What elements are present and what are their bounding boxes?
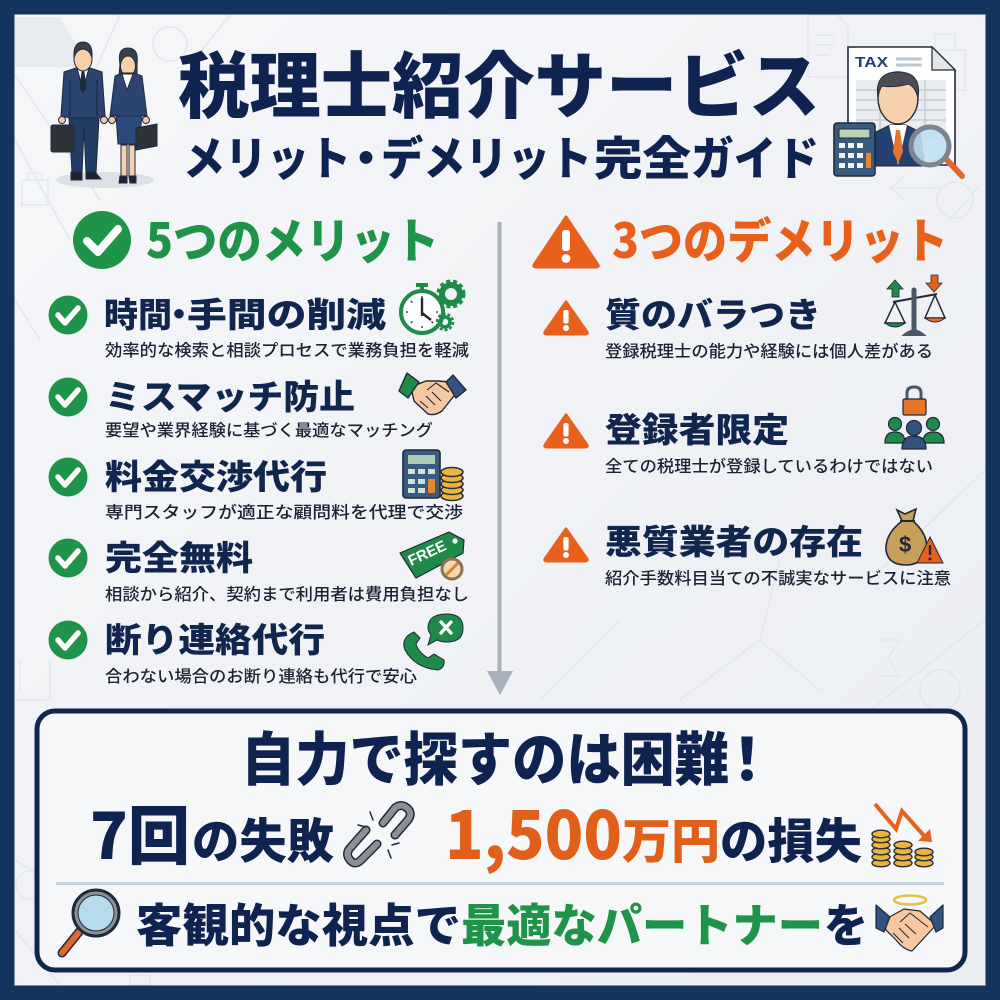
stat: loss <box>445 783 862 879</box>
icon: businesspeople <box>51 42 157 188</box>
merit 2: ミスマッチ防止 <box>105 370 355 419</box>
demerit 2 <box>545 387 944 476</box>
stat: failures <box>90 786 334 878</box>
icon: money bag with warning <box>886 509 943 565</box>
merit 1 <box>48 281 470 360</box>
conclusion text: を <box>824 890 868 956</box>
merit 1: 効率的な検索と相談プロセスで業務負担を軽減 <box>105 341 470 360</box>
demerit 3: 悪質業者の存在 <box>605 515 863 564</box>
icon: phone with x bubble <box>404 614 463 670</box>
merit header: 5つのメリット <box>146 202 439 272</box>
subtitle: デメリット <box>381 123 592 189</box>
demerit 2: 全ての税理士が登録しているわけではない <box>605 456 933 476</box>
icon: magnifier <box>62 892 117 953</box>
icon: lock and people <box>885 387 944 449</box>
icon: tax document advisor <box>834 47 962 176</box>
demerit 3: 紹介手数料目当ての不誠実なサービスに注意 <box>605 569 951 588</box>
subtitle: メリット <box>183 123 351 189</box>
divider <box>56 882 944 885</box>
stat: failures: の失敗 <box>192 802 334 872</box>
icon: broken chain <box>348 806 410 863</box>
merit 4 <box>48 531 469 604</box>
icon: stopwatch and gears <box>401 281 464 333</box>
demerit 3 <box>545 509 951 588</box>
merit 5: 合わない場合のお断り連絡も代行で安心 <box>105 667 418 686</box>
demerit 2: 登録者限定 <box>605 403 789 452</box>
merit 2: 要望や業界経験に基づく最適なマッチング <box>105 421 433 440</box>
conclusion text: 最適なパートナー <box>461 890 823 956</box>
icon: tax document advisor: TAX <box>855 54 888 71</box>
merit 4: 相談から紹介、契約まで利用者は費用負担なし <box>105 585 469 604</box>
icon: falling arrow and coins <box>872 804 933 867</box>
merit 1: ・ <box>162 288 196 337</box>
merit 5: 断り連絡代行 <box>105 613 325 662</box>
summary heading: ！ <box>718 713 776 797</box>
merit 4: 完全無料 <box>105 531 253 580</box>
icon: free tag: FREE <box>406 537 449 570</box>
stat: loss: 万円 <box>622 802 720 872</box>
icon: handshake with halo <box>876 896 943 951</box>
summary heading: 自力で探すのは困難 <box>241 713 729 797</box>
subtitle: ガイド <box>691 123 819 189</box>
merit 2 <box>48 370 466 440</box>
center arrow <box>487 222 513 695</box>
icon: handshake <box>399 373 466 415</box>
icon: scales <box>885 275 945 335</box>
subtitle: 完全 <box>594 123 691 189</box>
merit 1: 手間の削減 <box>187 288 386 337</box>
icon: check <box>73 211 131 269</box>
stat: loss: の損失 <box>720 802 862 872</box>
merit 3 <box>48 450 464 522</box>
conclusion text: 客観的な視点で <box>136 890 461 956</box>
icon: money bag with warning: $ <box>899 532 911 557</box>
merit 1: 時間 <box>104 288 172 337</box>
stat: loss: 1,500 <box>445 783 622 879</box>
icon: calculator and coins <box>403 450 463 500</box>
demerit header: 3つのデメリット <box>612 202 948 272</box>
subtitle <box>183 123 819 189</box>
demerit 1: 登録税理士の能力や経験には個人差がある <box>605 341 933 361</box>
icon: free tag <box>400 532 464 579</box>
stat: failures: 7回 <box>90 786 190 878</box>
merit 5 <box>48 613 463 686</box>
demerit 1: 質のバラつき <box>605 288 821 337</box>
summary panel <box>37 711 965 970</box>
conclusion text <box>136 890 868 956</box>
subtitle: ・ <box>343 123 389 189</box>
demerit 1 <box>545 275 945 361</box>
title: 税理士紹介サービス <box>178 28 820 133</box>
merit 3: 専門スタッフが適正な顧問料を代理で交渉 <box>105 502 464 522</box>
woman <box>108 48 157 183</box>
icon: warning <box>534 217 598 267</box>
merit 3: 料金交渉代行 <box>105 450 327 499</box>
man <box>51 42 108 180</box>
